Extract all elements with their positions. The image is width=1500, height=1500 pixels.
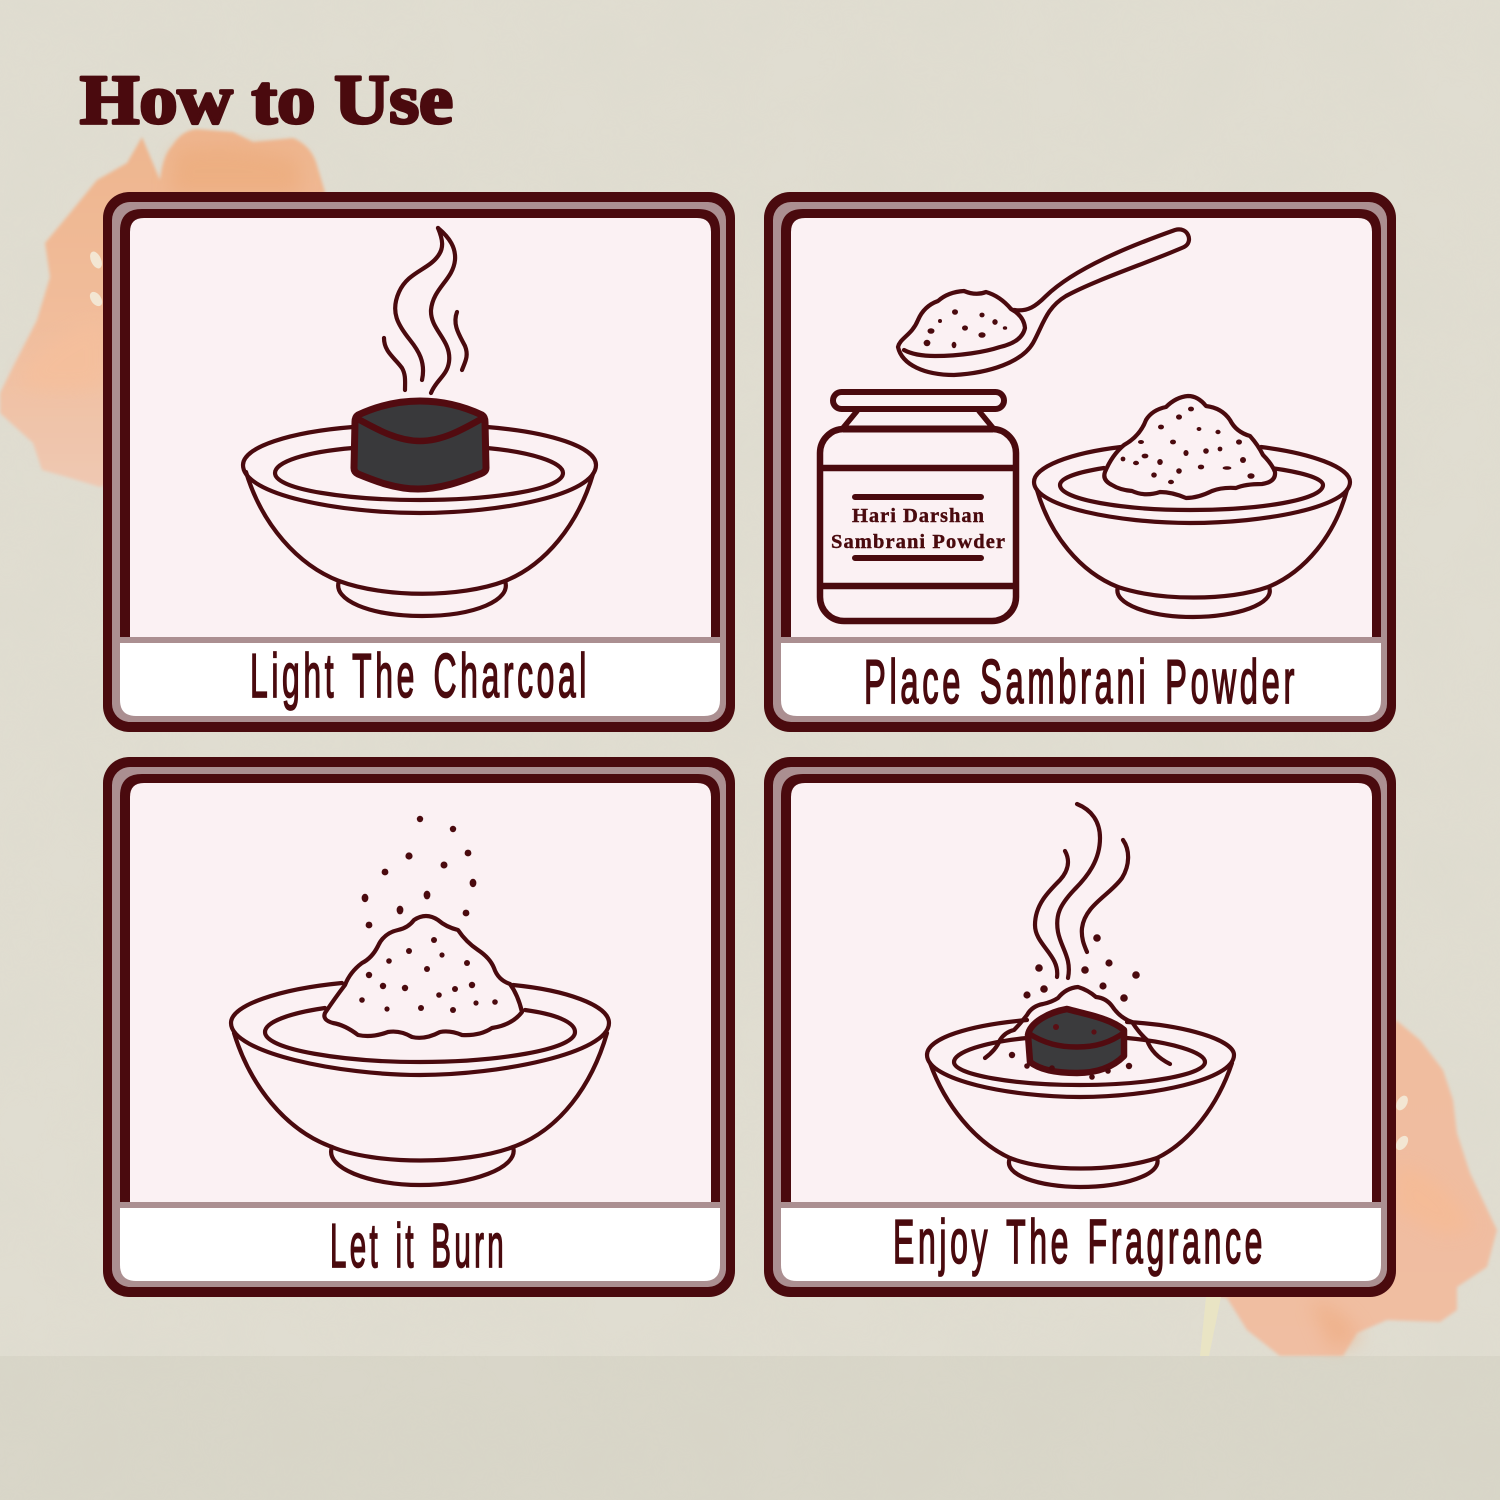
caption: step one: Light The Charcoal [250,642,590,711]
flower: bottom right [1190,1020,1497,1356]
flower stem [1200,1297,1221,1356]
illustration: powder in bowl [231,816,609,1185]
panel: let it burn [103,757,735,1297]
illustration: smoke from charcoal and powder [927,804,1234,1187]
illustration: bowl with powder [1034,396,1350,617]
illustration: spoon [898,229,1189,375]
jar label line two: Sambrani Powder [831,531,1005,553]
panel: place sambrani powder [764,192,1396,732]
jar label line one: Hari Darshan [852,505,985,527]
illustration: charcoal in bowl [243,228,596,616]
panel: enjoy the fragrance [764,757,1396,1297]
illustration: jar [820,392,1016,621]
panel: let it burn: Let it Burn [330,1212,507,1281]
bottom strip [0,1356,1500,1500]
title: How to Use [80,62,453,139]
flower: top left [0,129,325,487]
panel: light the charcoal [103,192,735,732]
